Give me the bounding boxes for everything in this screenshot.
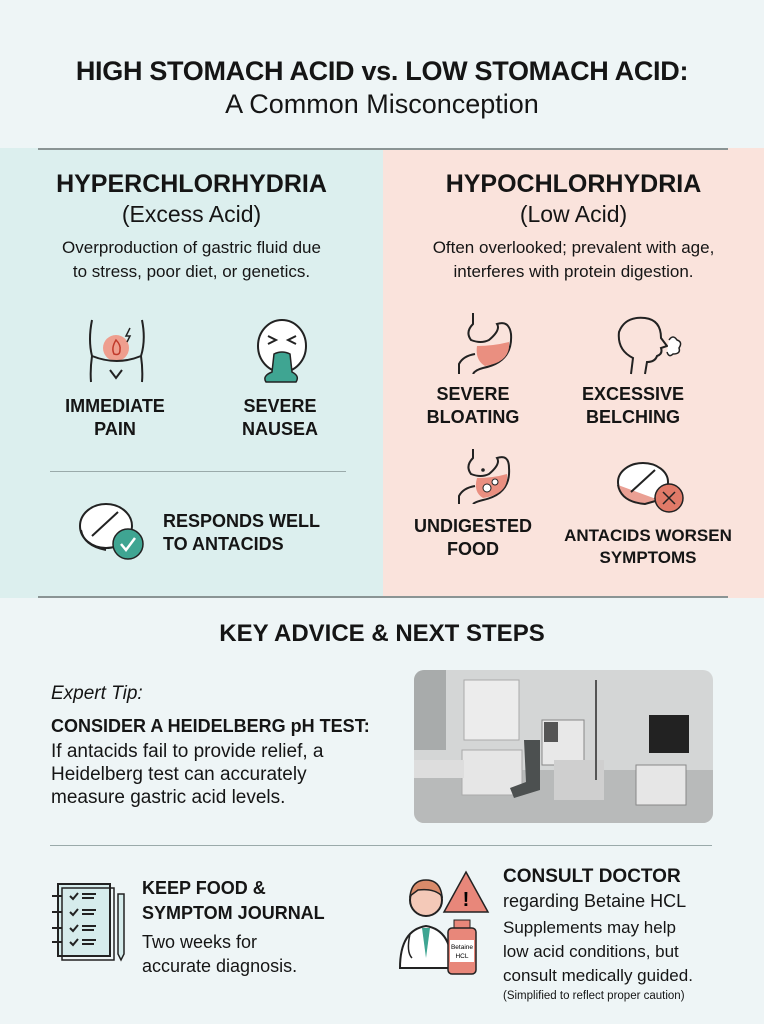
text: keep journal: SYMPTOM JOURNAL bbox=[142, 903, 325, 923]
icon: doctor with warning and bottle: ! bbox=[463, 889, 469, 911]
text: consult doctor: Supplements may help bbox=[503, 918, 676, 937]
icon: doctor with warning and bottle: HCL bbox=[455, 953, 469, 960]
icon: doctor with warning and bottle bbox=[399, 870, 490, 975]
label: undigested food bbox=[414, 516, 532, 559]
title bbox=[76, 56, 688, 119]
expert tip text: Heidelberg test can accurately bbox=[51, 764, 307, 785]
label: excessive belching: EXCESSIVE bbox=[582, 384, 684, 404]
expert tip text bbox=[51, 683, 370, 808]
label: antacids worsen symptoms bbox=[564, 526, 732, 567]
text: consult doctor: regarding Betaine HCL bbox=[503, 891, 686, 911]
icon: doctor with warning and bottle: Betaine bbox=[451, 944, 473, 951]
heading: key advice: KEY ADVICE & NEXT STEPS bbox=[219, 620, 545, 647]
description: Overproduction of gastric fluid due bbox=[62, 238, 321, 257]
icon: journal bbox=[52, 883, 125, 962]
heading: hypochlorhydria: (Low Acid) bbox=[520, 201, 627, 227]
label: severe nausea: NAUSEA bbox=[242, 419, 318, 439]
heading: hyperchlorhydria: (Excess Acid) bbox=[122, 201, 261, 227]
label: immediate pain bbox=[65, 396, 165, 439]
text: consult doctor: low acid conditions, but bbox=[503, 942, 679, 961]
label: responds well to antacids: RESPONDS WELL bbox=[163, 511, 320, 531]
heading: hypochlorhydria: HYPOCHLORHYDRIA bbox=[446, 170, 701, 198]
description: interferes with protein digestion. bbox=[453, 262, 694, 281]
text: keep journal: Two weeks for bbox=[142, 932, 257, 952]
label: antacids worsen symptoms: ANTACIDS WORSEN bbox=[564, 526, 732, 545]
text: consult doctor bbox=[503, 866, 693, 1002]
label: severe nausea: SEVERE bbox=[243, 396, 317, 416]
title: A Common Misconception bbox=[225, 89, 539, 119]
panel: hyperchlorhydria bbox=[0, 148, 383, 598]
label: responds well to antacids: TO ANTACIDS bbox=[163, 534, 284, 554]
icon: undigested food stomach bbox=[458, 449, 510, 504]
expert tip text: measure gastric acid levels. bbox=[51, 787, 285, 808]
label: excessive belching bbox=[582, 384, 684, 427]
label: severe bloating bbox=[427, 384, 519, 427]
text: consult doctor: consult medically guided. bbox=[503, 966, 693, 985]
icon: belching head bbox=[618, 316, 682, 374]
icon: bloated stomach bbox=[458, 313, 512, 374]
label: severe nausea bbox=[242, 396, 318, 439]
text: keep journal: accurate diagnosis. bbox=[142, 956, 297, 976]
expert tip text: If antacids fail to provide relief, a bbox=[51, 741, 323, 762]
heading: hypochlorhydria bbox=[446, 170, 701, 227]
description: to stress, poor diet, or genetics. bbox=[73, 262, 310, 281]
icon: abdomen pain bbox=[89, 320, 145, 382]
text: consult doctor: (Simplified to reflect proper caution) bbox=[503, 990, 685, 1002]
label: severe bloating: SEVERE bbox=[436, 384, 510, 404]
photo: clinic room bbox=[414, 670, 713, 823]
label: immediate pain: PAIN bbox=[94, 419, 136, 439]
description bbox=[62, 238, 321, 281]
label: severe bloating: BLOATING bbox=[427, 407, 519, 427]
text: keep journal bbox=[142, 878, 325, 976]
heading: hyperchlorhydria bbox=[56, 170, 327, 227]
title: HIGH STOMACH ACID vs. LOW STOMACH ACID: bbox=[76, 56, 688, 86]
label: excessive belching: BELCHING bbox=[586, 407, 680, 427]
label: undigested food: UNDIGESTED bbox=[414, 516, 532, 536]
text: keep journal: KEEP FOOD & bbox=[142, 878, 266, 898]
description: Often overlooked; prevalent with age, bbox=[433, 238, 714, 257]
label: immediate pain: IMMEDIATE bbox=[65, 396, 165, 416]
icon: antacid pill with check bbox=[79, 503, 144, 560]
expert tip text: Expert Tip: bbox=[51, 683, 143, 704]
description bbox=[433, 238, 714, 281]
label: antacids worsen symptoms: SYMPTOMS bbox=[600, 548, 696, 567]
icon: pill with X bbox=[617, 462, 684, 513]
label: undigested food: FOOD bbox=[447, 539, 499, 559]
text: consult doctor: CONSULT DOCTOR bbox=[503, 866, 681, 887]
heading: hyperchlorhydria: HYPERCHLORHYDRIA bbox=[56, 170, 327, 198]
label: responds well to antacids bbox=[163, 511, 320, 554]
panel: hypochlorhydria bbox=[383, 148, 764, 598]
icon: nausea face bbox=[257, 319, 307, 383]
expert tip text: CONSIDER A HEIDELBERG pH TEST: bbox=[51, 716, 370, 736]
